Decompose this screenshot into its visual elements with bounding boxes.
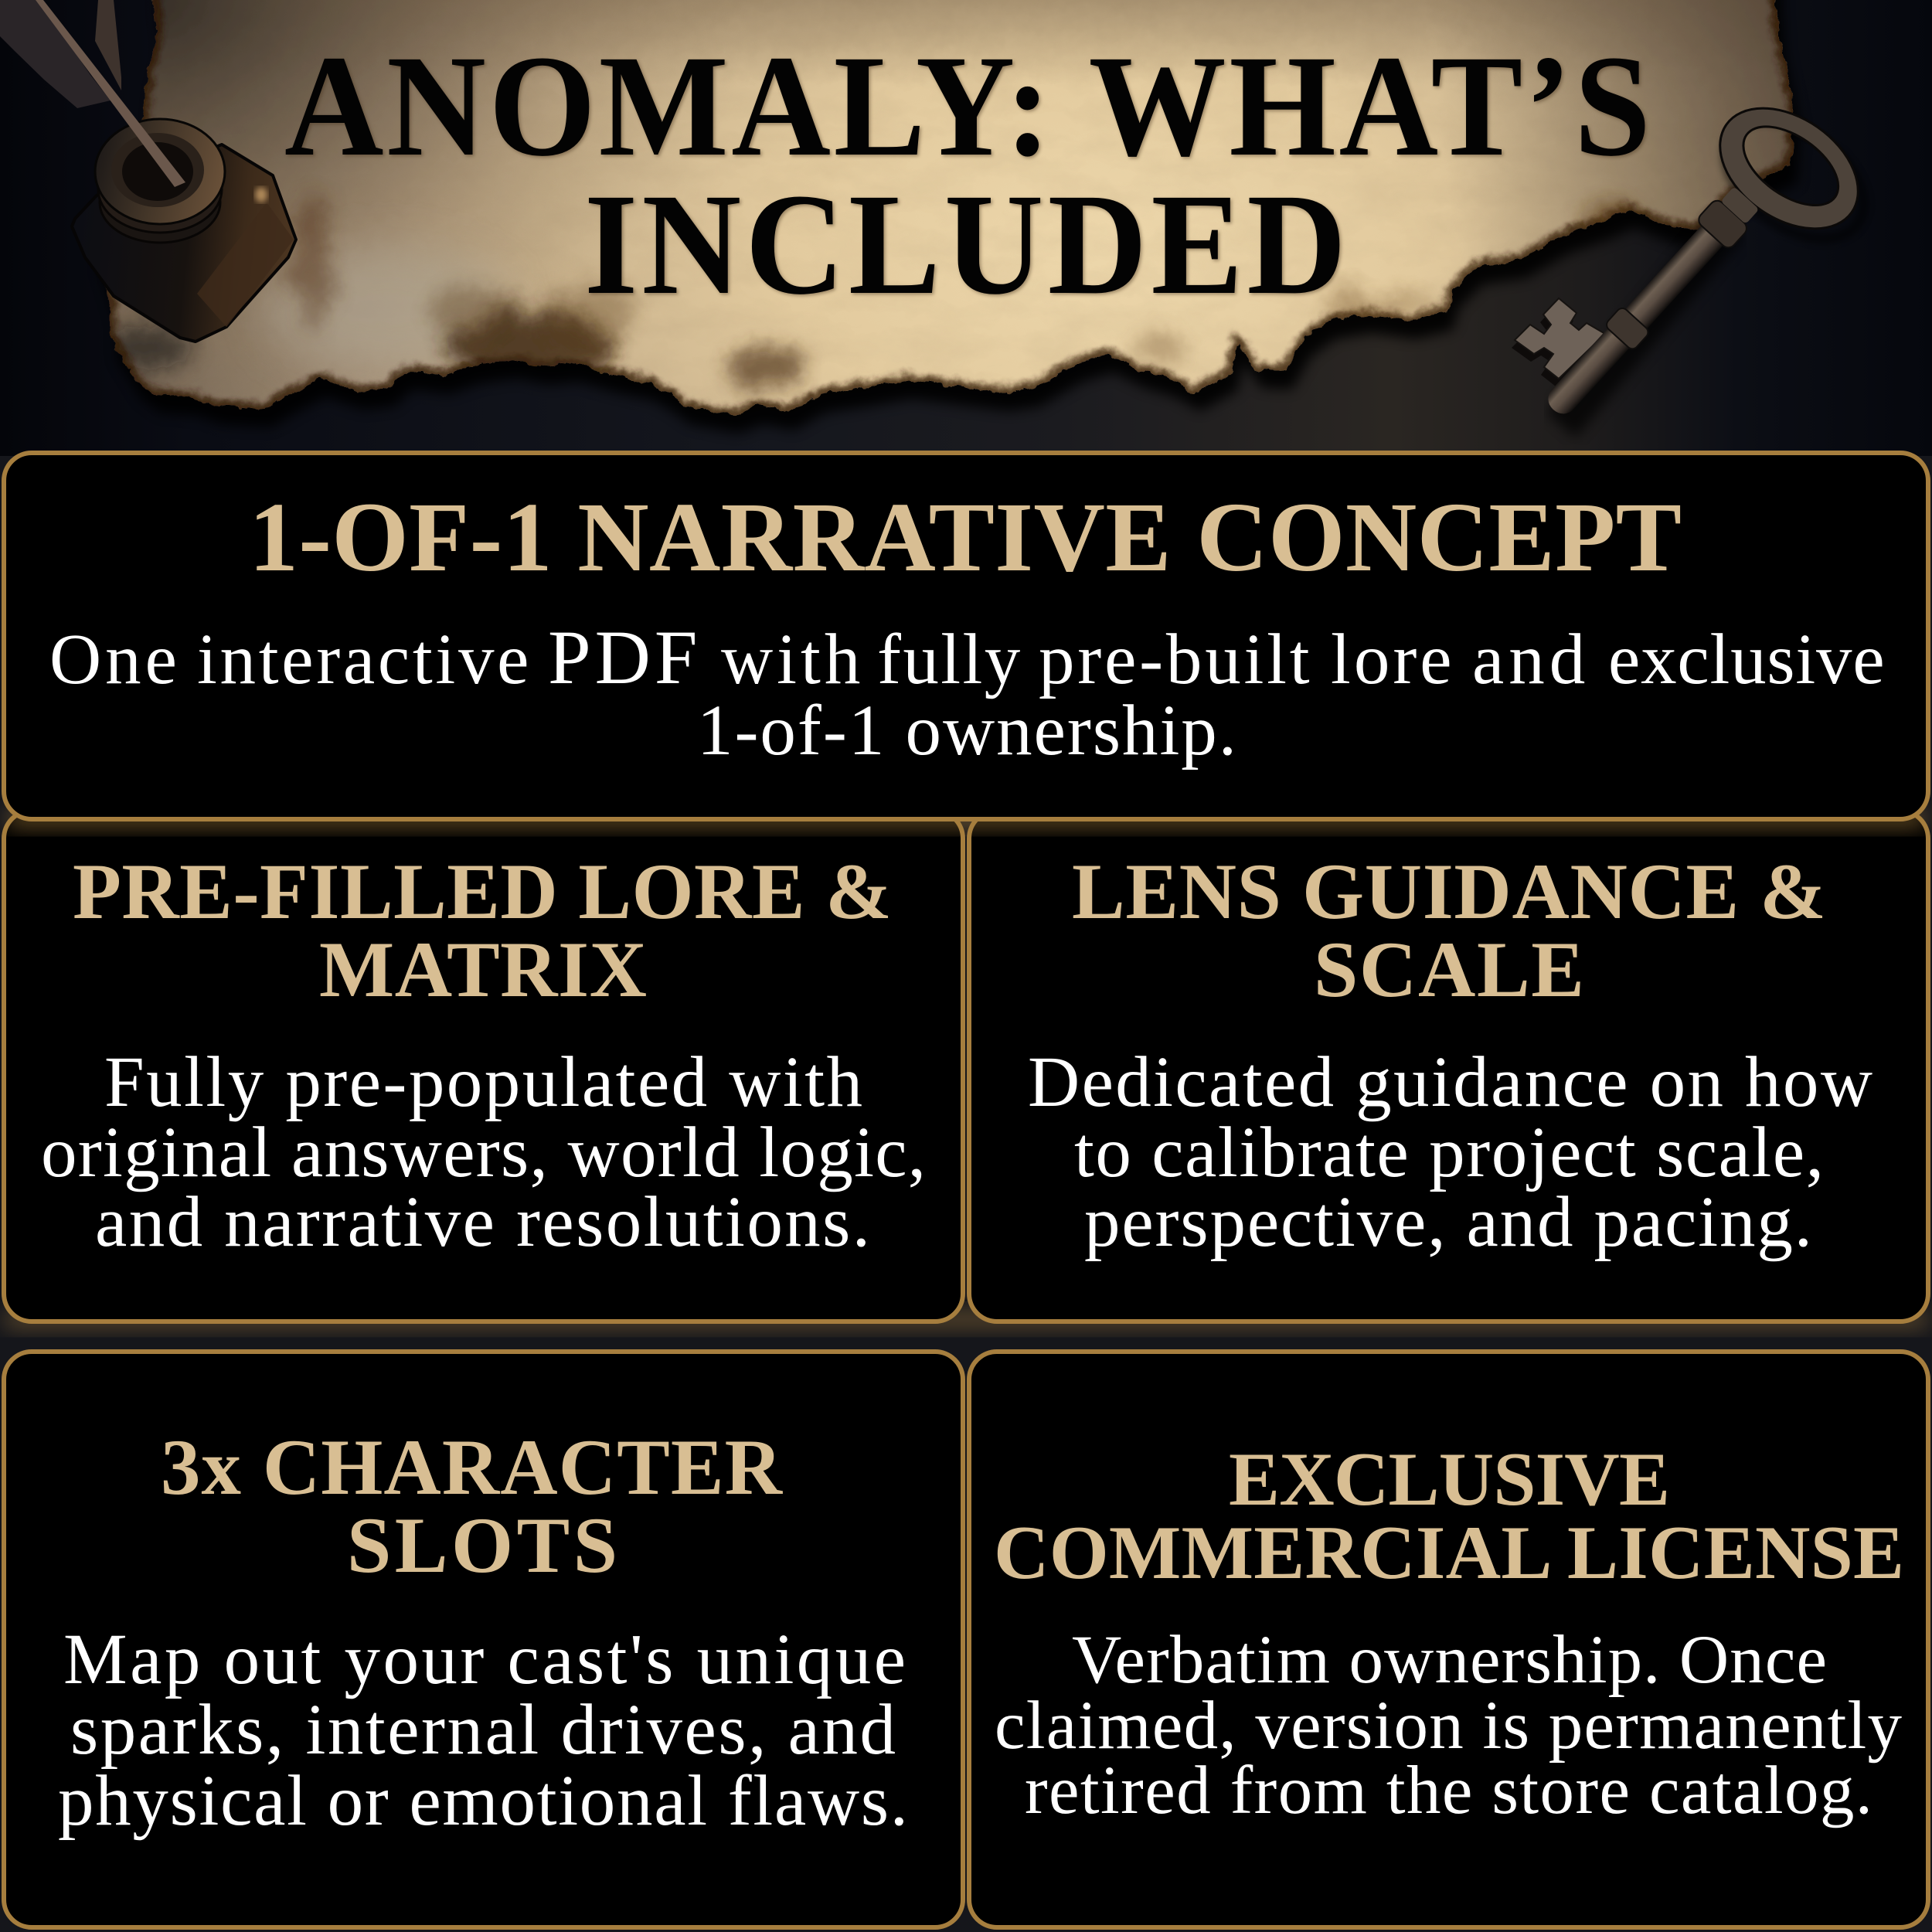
icon: feather quill	[0, 0, 121, 108]
body: narrative concept: PDF	[548, 614, 701, 700]
heading: pre-filled lore	[73, 848, 892, 1014]
body: commercial license	[995, 1622, 1903, 1828]
heading: commercial license	[994, 1437, 1904, 1595]
body: commercial license: Verbatim ownership. Once	[1072, 1622, 1827, 1698]
body: commercial license: claimed, version is permanently	[995, 1688, 1903, 1764]
body: lens guidance	[1028, 1043, 1872, 1262]
heading: character slots: SLOTS	[347, 1502, 617, 1590]
body: character slots: Map out your cast's unique	[63, 1620, 906, 1699]
parchment shadow	[99, 0, 1801, 434]
body: narrative concept	[49, 614, 1885, 770]
title	[284, 26, 1651, 325]
body: pre-filled lore: and narrative resolutions.	[95, 1182, 870, 1262]
heading: commercial license: EXCLUSIVE	[1229, 1437, 1670, 1522]
body: narrative concept: exclusive	[1608, 620, 1885, 699]
body: pre-filled lore: original answers, world logic,	[41, 1113, 926, 1192]
panel: pre-filled lore and matrix	[4, 811, 963, 1321]
body: narrative concept: with	[721, 620, 864, 699]
body: narrative concept: and	[1472, 620, 1590, 699]
body: lens guidance: Dedicated guidance on how	[1028, 1043, 1872, 1122]
body: character slots	[58, 1620, 908, 1841]
heading: lens guidance: LENS GUIDANCE &	[1072, 848, 1826, 936]
body: narrative concept: lore	[1331, 620, 1455, 699]
panel: 1-of-1 narrative concept	[4, 453, 1928, 819]
icon: antique key	[1512, 83, 1885, 425]
heading: lens guidance: SCALE	[1314, 926, 1584, 1014]
body: character slots: sparks, internal drives, and	[70, 1690, 896, 1770]
body: narrative concept: fully	[877, 620, 1022, 699]
heading: commercial license: COMMERCIAL LICENSE	[994, 1511, 1904, 1595]
header banner	[0, 0, 1932, 456]
heading: character slots: 3x CHARACTER	[161, 1423, 784, 1512]
title: ANOMALY: WHAT’S	[284, 26, 1651, 186]
body: narrative concept: 1-of-1 ownership.	[697, 691, 1236, 770]
body: lens guidance: perspective, and pacing.	[1084, 1182, 1812, 1262]
heading: pre-filled lore: MATRIX	[319, 926, 647, 1014]
heading: narrative concept: 1-OF-1 NARRATIVE CONCEPT	[249, 482, 1682, 592]
scorch marks	[293, 193, 1642, 389]
burnt parchment	[77, 0, 1824, 433]
panel: lens guidance and scale	[969, 811, 1928, 1321]
body: narrative concept: interactive	[197, 620, 532, 699]
body: commercial license: retired from the store catalog.	[1025, 1753, 1872, 1828]
icon: ink bottle	[36, 0, 296, 342]
dark desk surface	[0, 0, 1932, 456]
body: narrative concept: One	[49, 620, 181, 699]
panel: exclusive commercial license	[969, 1352, 1928, 1927]
body: pre-filled lore: Fully pre-populated with	[104, 1043, 862, 1122]
heading: pre-filled lore: PRE-FILLED LORE &	[73, 848, 892, 936]
body: character slots: physical or emotional flaws.	[58, 1761, 908, 1841]
body: pre-filled lore	[41, 1043, 926, 1262]
title: INCLUDED	[584, 164, 1346, 325]
heading: lens guidance	[1072, 848, 1826, 1014]
body: lens guidance: to calibrate project scale,	[1074, 1113, 1824, 1192]
heading: character slots	[161, 1423, 784, 1590]
panel: 3x character slots	[4, 1352, 963, 1927]
body: narrative concept: pre-built	[1039, 620, 1312, 699]
